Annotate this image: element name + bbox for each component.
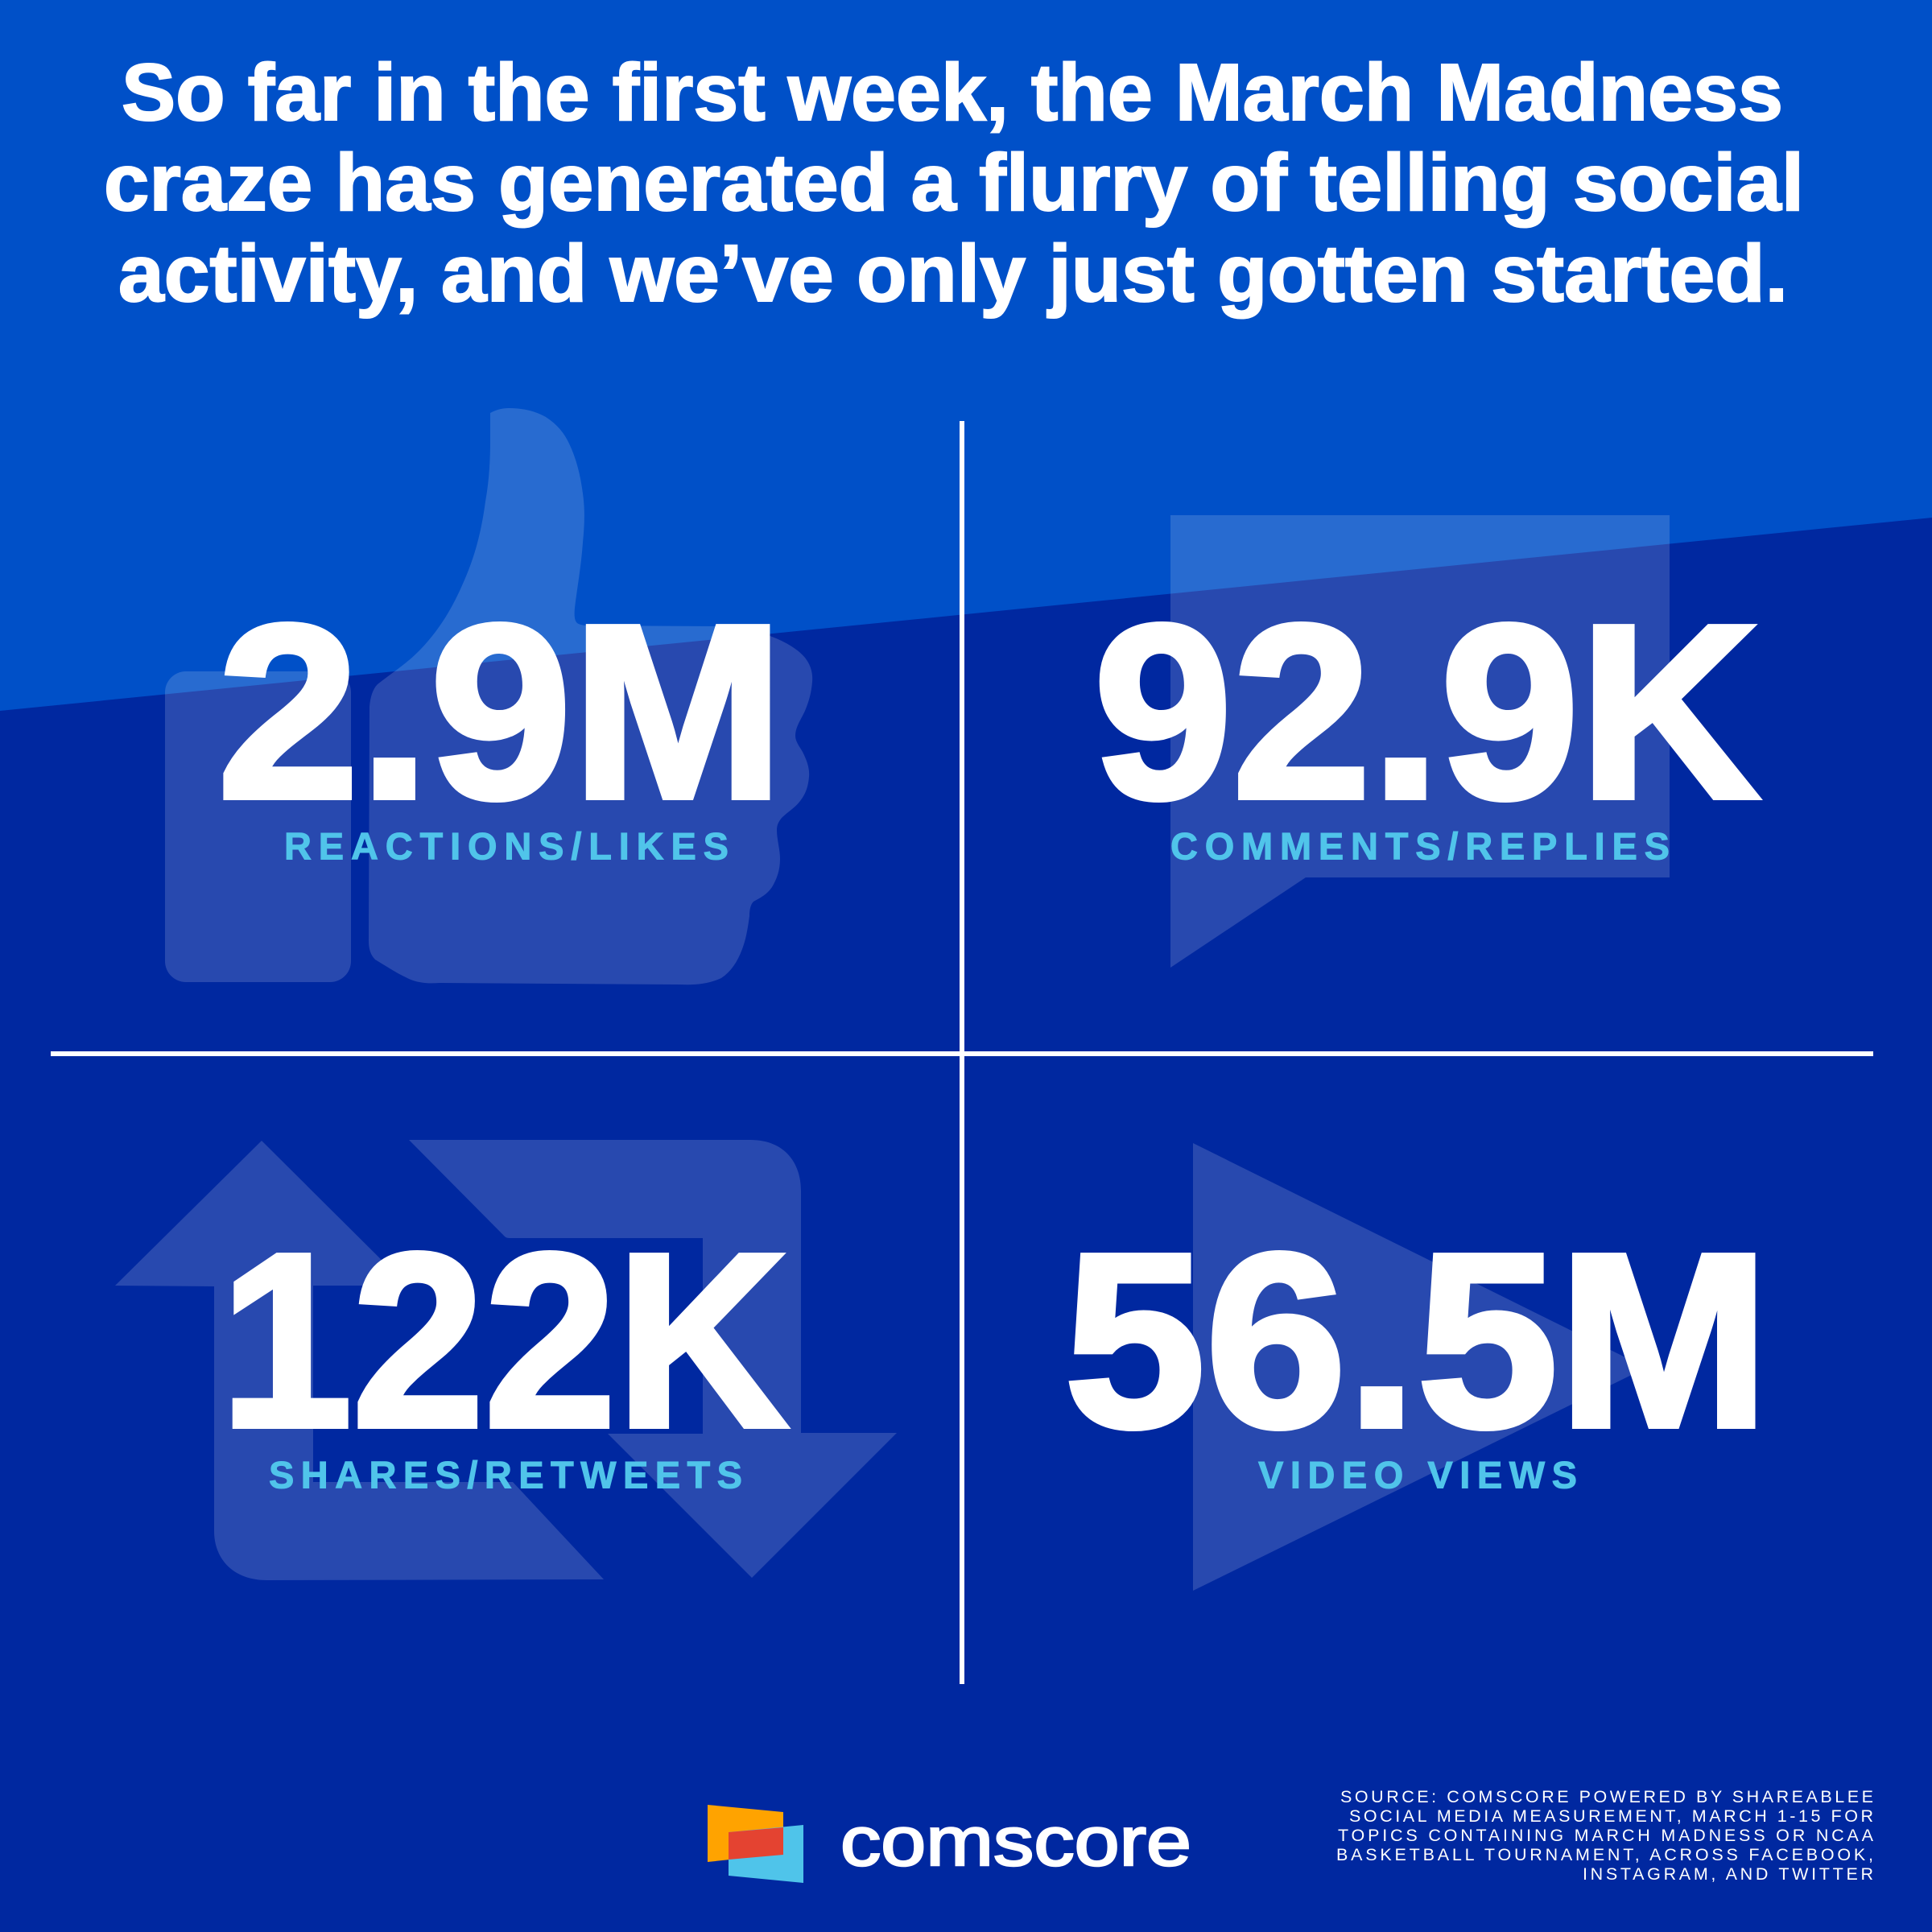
stat value: 92.9K [1093,573,1760,850]
stat label: VIDEO VIEWS [1258,1454,1577,1496]
source note [1336,1787,1874,1884]
source note: TOPICS CONTAINING MARCH MADNESS OR NCAA [1338,1826,1874,1845]
stat label: COMMENTS/REPLIES [1170,824,1670,868]
icon: logo mark [708,1805,803,1883]
stat value: 56.5M [1064,1203,1769,1480]
panel: comments/replies [1093,515,1760,968]
source note: SOURCE: COMSCORE POWERED BY SHAREABLEE [1340,1787,1873,1806]
icon: play triangle [1193,1143,1646,1591]
source note: INSTAGRAM, AND TWITTER [1583,1864,1873,1884]
stat label: REACTIONS/LIKES [284,824,729,868]
stat value: 2.9M [217,573,784,850]
title: craze has generated a flurry of telling social [104,138,1804,228]
title: So far in the first week, the March Madness [122,47,1783,138]
title: activity, and we’ve only just gotten started. [118,229,1788,319]
source note: BASKETBALL TOURNAMENT, ACROSS FACEBOOK, [1336,1845,1873,1864]
panel: reactions/likes [165,408,812,985]
stat value: 122K [221,1203,787,1480]
panel: shares/retweets [115,1140,897,1580]
stat label: SHARES/RETWEETS [269,1454,742,1496]
logo wordmark: comscore [840,1803,1191,1880]
icon: thumbs up [165,408,812,985]
source note: SOCIAL MEDIA MEASUREMENT, MARCH 1-15 FOR [1349,1806,1873,1826]
icon: retweet arrows [115,1140,897,1580]
icon: speech bubble [1170,515,1670,968]
comscore logo [708,1803,1191,1883]
title [104,47,1804,319]
panel: video views [1064,1143,1769,1591]
